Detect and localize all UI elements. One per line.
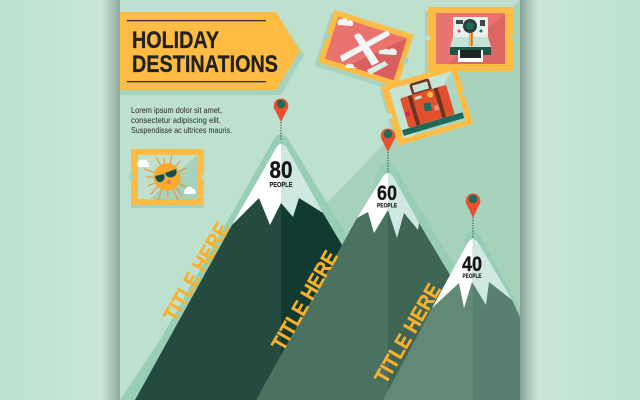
rotated title 3: TITLE HERE	[370, 280, 446, 388]
intro text: Suspendisse ac ultrices mauris.	[131, 125, 232, 135]
label: 80 people: PEOPLE	[270, 180, 292, 189]
snow cap 2	[357, 173, 419, 238]
snow cap 3	[432, 239, 512, 308]
intro text: consectetur adipiscing elit.	[131, 115, 221, 125]
icon: sun ticket	[128, 149, 206, 208]
icon: plane ticket	[314, 9, 417, 92]
icon: camera ticket	[425, 7, 516, 75]
rotated title 2: TITLE HERE	[267, 247, 343, 354]
label: 80 people: 80	[270, 157, 292, 184]
pin 3	[466, 194, 480, 238]
pin 1	[274, 99, 288, 140]
mountain halos	[120, 134, 520, 400]
icon: suitcase ticket	[378, 63, 477, 150]
mountain 1	[135, 144, 345, 400]
title banner	[120, 12, 304, 95]
heading: HOLIDAY	[132, 27, 219, 54]
mountain 2	[256, 173, 450, 400]
label: 40 people: PEOPLE	[462, 273, 482, 280]
label: 60 people: 60	[377, 182, 397, 205]
poster background	[120, 0, 520, 400]
pin 2	[381, 129, 395, 172]
intro text: Lorem ipsum dolor sit amet,	[131, 105, 222, 115]
rotated title 1: TITLE HERE	[159, 219, 234, 326]
plane	[340, 30, 390, 75]
label: 40 people: 40	[462, 253, 482, 276]
heading: DESTINATIONS	[132, 51, 278, 78]
label: 60 people: PEOPLE	[377, 202, 397, 210]
snow cap 1	[232, 144, 323, 225]
mountain 3	[383, 239, 520, 400]
